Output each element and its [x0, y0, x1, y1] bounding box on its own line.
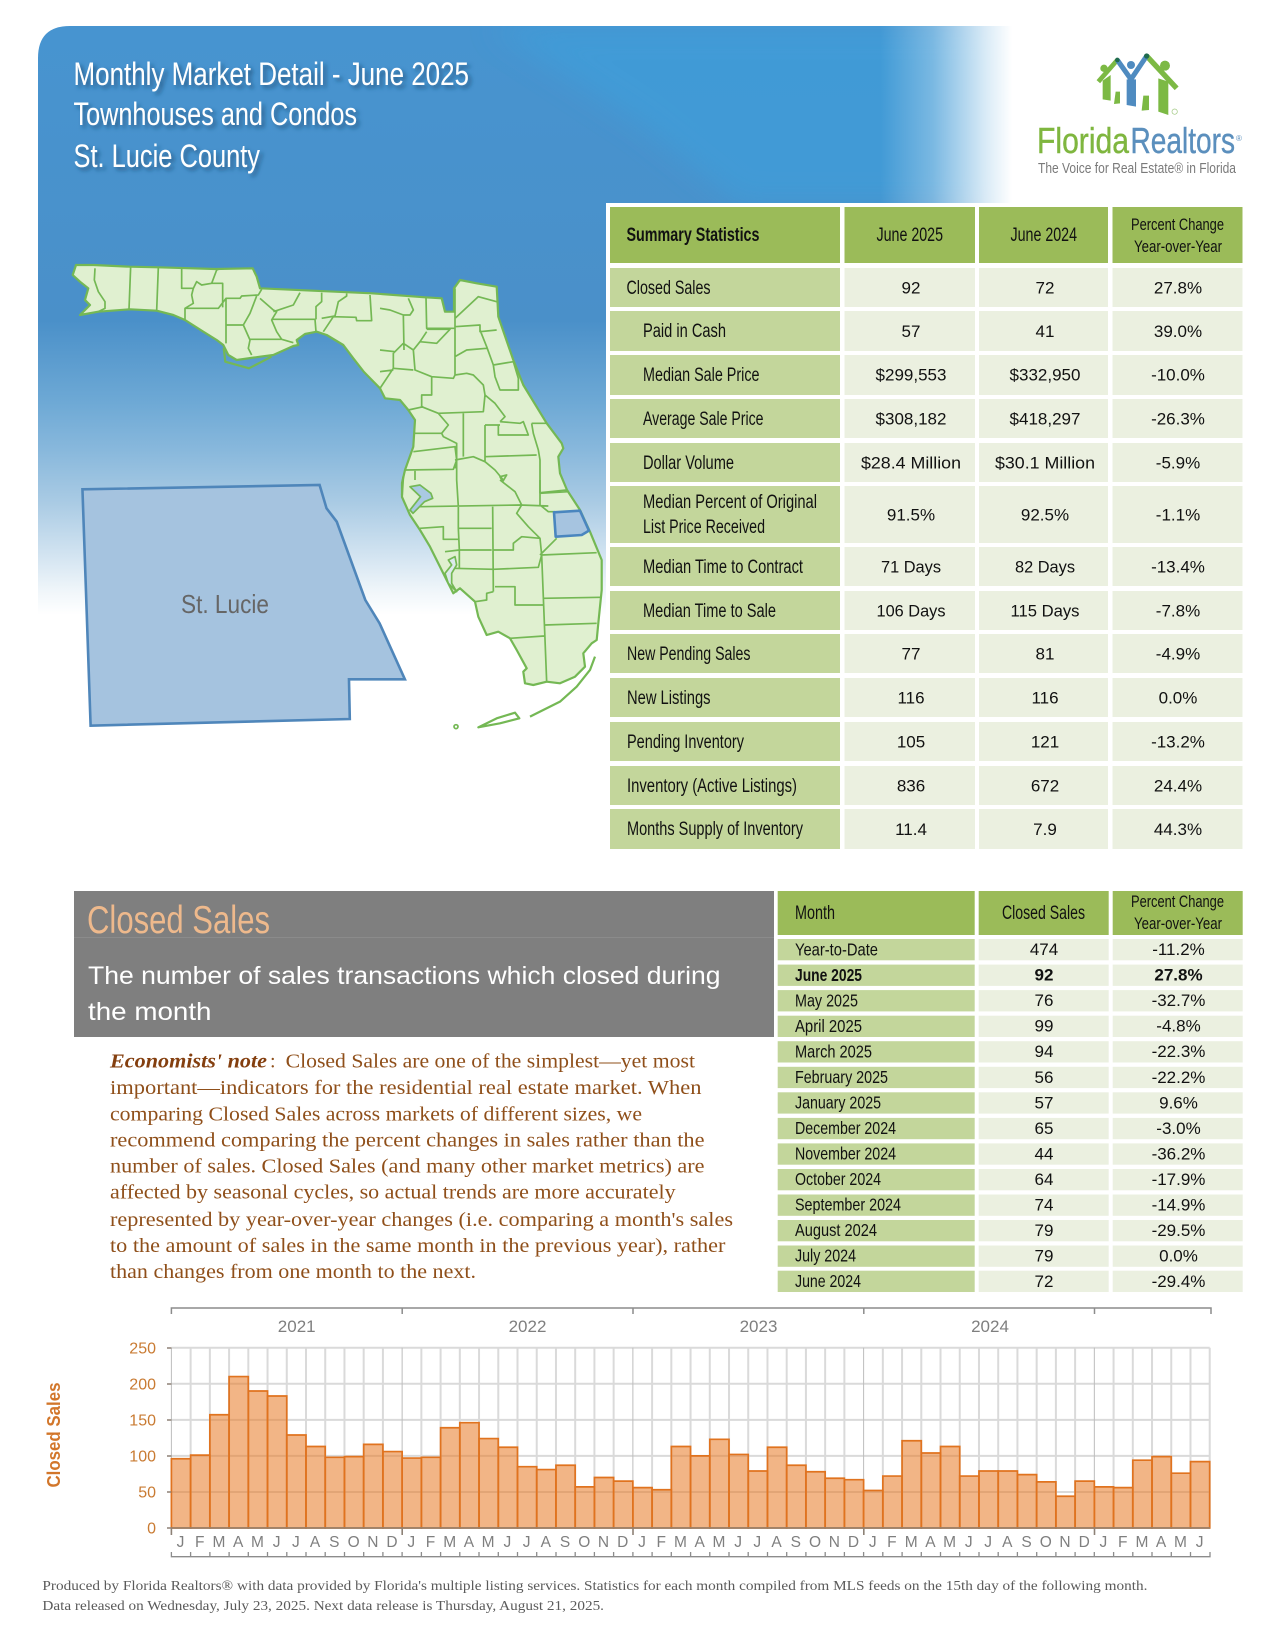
row: Closed Sales: Closed Sales — [626, 278, 710, 299]
row: April 2025: April 2025 — [795, 1016, 862, 1036]
logo: Florida Realtors: ® — [1236, 134, 1242, 143]
row: New Listings: 116 — [1031, 688, 1059, 708]
row: Median Time to Contract: 71 Days — [881, 558, 941, 576]
row: Months Supply of Inventory: 11.4 — [895, 820, 927, 839]
row: Closed Sales — [610, 268, 1242, 307]
table header: June 2025 — [876, 225, 943, 246]
row: Median Percent of Original List Price Received: Median Percent of Original — [643, 492, 817, 513]
header banner background — [0, 0, 1275, 640]
row: June 2025: June 2025 — [795, 965, 862, 985]
row: Closed Sales: 27.8% — [1154, 278, 1202, 298]
y axis labels: 100 — [129, 1448, 156, 1466]
wordmark: Florida — [1037, 120, 1130, 161]
text block: economists' note: comparing Closed Sales across markets of different sizes, we — [110, 1104, 642, 1126]
row: Median Sale Price: -10.0% — [1151, 366, 1205, 384]
panel: Closed Sales heading: the month — [88, 998, 212, 1026]
row: Inventory (Active Listings): 836 — [897, 776, 925, 796]
highlighted county on state map — [554, 511, 589, 537]
row: April 2025 — [778, 1016, 1243, 1037]
row: Closed Sales: 72 — [1036, 278, 1054, 298]
row: Pending Inventory: Pending Inventory — [627, 732, 744, 753]
row: Median Time to Sale: 106 Days — [876, 602, 946, 620]
map: St. Lucie county enlarged — [82, 485, 405, 726]
month labels: JFMAMJJASONDJFMAMJJASONDJFMAMJJASONDJFMAMJJASONDJFMAMJ — [177, 1534, 1203, 1551]
y axis labels: 250 — [129, 1340, 156, 1358]
row: Median Time to Sale — [610, 591, 1242, 630]
row: October 2024: -17.9% — [1152, 1170, 1205, 1189]
county lines: south peninsula — [420, 480, 600, 729]
table header: Month — [795, 903, 835, 924]
row: Median Time to Sale: -7.8% — [1156, 602, 1200, 620]
title — [74, 56, 469, 174]
row: Pending Inventory — [610, 722, 1242, 761]
row: January 2025: January 2025 — [795, 1092, 881, 1112]
row: Year-to-Date — [778, 939, 1243, 960]
row: November 2024: -36.2% — [1152, 1144, 1205, 1163]
row: New Pending Sales: -4.9% — [1156, 644, 1200, 664]
row: May 2025: -32.7% — [1152, 991, 1205, 1010]
row: New Listings: New Listings — [627, 688, 710, 709]
row: April 2025: -4.8% — [1156, 1017, 1201, 1036]
row: January 2025: 57 — [1035, 1093, 1053, 1112]
row: September 2024: -14.9% — [1152, 1196, 1205, 1214]
row: Inventory (Active Listings): 672 — [1031, 776, 1059, 796]
Tampa Bay — [410, 485, 433, 513]
row: Closed Sales: 92 — [902, 278, 920, 298]
table header — [610, 207, 1242, 263]
text block: economists' note: represented by year-over-year changes (i.e. comparing a month's sales — [110, 1209, 733, 1231]
row: Median Time to Contract: -13.4% — [1151, 558, 1205, 576]
row: Median Sale Price — [610, 355, 1242, 395]
row: Dollar Volume: $30.1 Million — [995, 454, 1095, 472]
row: November 2024: 44 — [1035, 1144, 1053, 1163]
row: November 2024 — [778, 1143, 1243, 1165]
row: Median Percent of Original List Price Received: -1.1% — [1156, 506, 1200, 524]
barrier islands — [224, 348, 403, 495]
row: Months Supply of Inventory: Months Supply of Inventory — [627, 819, 803, 840]
row: Year-to-Date: Year-to-Date — [795, 940, 878, 960]
logo: Florida Realtors: Realtors — [1130, 120, 1235, 161]
row: Paid in Cash: 39.0% — [1154, 322, 1202, 341]
row: December 2024: -3.0% — [1156, 1119, 1201, 1138]
row: Inventory (Active Listings): 24.4% — [1154, 776, 1202, 796]
row: May 2025: May 2025 — [795, 990, 858, 1010]
row: Average Sale Price: -26.3% — [1151, 410, 1205, 428]
row: Dollar Volume: -5.9% — [1156, 454, 1200, 472]
table header: Year-over-Year — [1134, 915, 1222, 933]
row: Dollar Volume: $28.4 Million — [861, 454, 961, 472]
tagline: The Voice for Real Estate® in Florida — [1038, 161, 1237, 177]
Florida Keys — [478, 657, 595, 727]
row: New Listings — [610, 678, 1242, 717]
text block: economists' note — [109, 1051, 733, 1283]
heading: Closed Sales — [87, 899, 270, 942]
row: October 2024 — [778, 1169, 1243, 1190]
row: June 2024: June 2024 — [795, 1271, 861, 1291]
y axis labels: 150 — [129, 1412, 156, 1430]
text block: economists' note: than changes from one month to the next. — [110, 1261, 476, 1283]
row: Dollar Volume — [610, 443, 1242, 482]
row: September 2024: 74 — [1035, 1196, 1053, 1214]
state outline — [73, 265, 602, 685]
row: April 2025: 99 — [1035, 1017, 1053, 1036]
row: Dollar Volume: Dollar Volume — [643, 453, 734, 474]
row: December 2024: 65 — [1035, 1119, 1053, 1138]
year labels: 2021 — [278, 1317, 316, 1336]
row: October 2024: 64 — [1035, 1170, 1053, 1189]
row: February 2025: 56 — [1035, 1068, 1053, 1087]
row: New Listings: 0.0% — [1159, 688, 1197, 708]
row: August 2024 — [778, 1220, 1243, 1241]
row: May 2025 — [778, 990, 1243, 1011]
row: February 2025: February 2025 — [795, 1067, 888, 1087]
row: January 2025: 9.6% — [1159, 1093, 1198, 1112]
row: Median Percent of Original List Price Received — [610, 486, 1242, 543]
panel: closed sales by month table — [778, 891, 1243, 1292]
row: Months Supply of Inventory: 7.9 — [1033, 820, 1057, 839]
row: August 2024: -29.5% — [1152, 1221, 1205, 1240]
row: Paid in Cash: 41 — [1036, 322, 1054, 341]
row: Median Percent of Original List Price Received: List Price Received — [643, 517, 765, 538]
row: June 2025 — [778, 965, 1243, 986]
row: Pending Inventory: 105 — [897, 732, 925, 752]
county lines: panhandle — [94, 267, 372, 355]
row: December 2024: December 2024 — [795, 1118, 896, 1138]
row: Year-to-Date: 474 — [1030, 940, 1058, 959]
row: Paid in Cash — [610, 311, 1242, 351]
row: Paid in Cash: 57 — [902, 322, 920, 341]
row: Average Sale Price: $308,182 — [876, 410, 946, 428]
row: Median Time to Contract: 82 Days — [1015, 558, 1075, 576]
row: August 2024: 79 — [1035, 1221, 1053, 1240]
row: July 2024: 79 — [1035, 1246, 1053, 1266]
table header: Summary Statistics — [626, 225, 760, 246]
row: June 2024 — [778, 1271, 1243, 1292]
row: January 2025 — [778, 1092, 1243, 1114]
y axis labels — [129, 1340, 156, 1538]
year labels: 2022 — [509, 1317, 546, 1336]
bar chart: closed sales 2021-2025 — [44, 1308, 1211, 1557]
row: Median Time to Contract — [610, 547, 1242, 586]
row: June 2024: -29.4% — [1152, 1272, 1205, 1291]
county label: St. Lucie — [181, 589, 269, 619]
row: June 2024: 72 — [1035, 1272, 1053, 1291]
map: Florida counties — [73, 265, 602, 729]
row: March 2025: March 2025 — [795, 1042, 872, 1062]
plot — [171, 1348, 1210, 1528]
row: Median Percent of Original List Price Received: 91.5% — [887, 506, 935, 524]
row: Median Percent of Original List Price Received: 92.5% — [1021, 506, 1069, 524]
text block: economists' note: recommend comparing the percent changes in sales rather than the — [110, 1130, 705, 1152]
x axis lines and ticks — [167, 1348, 1210, 1535]
row: July 2024: July 2024 — [795, 1246, 856, 1266]
row: New Pending Sales: 77 — [902, 644, 920, 664]
row: September 2024 — [778, 1194, 1243, 1216]
row: July 2024: 0.0% — [1159, 1246, 1198, 1266]
footer note: Produced by Florida Realtors® with data provided by Florida's multiple listing services. Statistics for each month compiled from MLS feeds on the 15th day of the following month. — [42, 1579, 1147, 1594]
row: Year-to-Date: -11.2% — [1152, 940, 1205, 959]
row: Average Sale Price — [610, 399, 1242, 438]
row: Median Time to Sale: 115 Days — [1010, 602, 1080, 620]
county lines: north peninsula — [380, 288, 567, 493]
footer note — [42, 1579, 1147, 1614]
table header: Closed Sales — [1002, 903, 1085, 924]
row: February 2025: -22.2% — [1152, 1068, 1205, 1087]
panel: Closed Sales heading — [74, 891, 774, 1037]
row: June 2025: 27.8% — [1154, 966, 1203, 984]
row: November 2024: November 2024 — [795, 1144, 896, 1164]
row: September 2024: September 2024 — [795, 1194, 901, 1214]
table header: Percent Change — [1131, 893, 1224, 911]
title: Monthly Market Detail - June 2025 — [74, 56, 469, 92]
row: August 2024: August 2024 — [795, 1220, 877, 1240]
table header: June 2024 — [1010, 225, 1077, 246]
text block: economists' note: : — [270, 1051, 276, 1073]
row: March 2025: 94 — [1035, 1042, 1053, 1061]
row: New Pending Sales — [610, 634, 1242, 673]
row: Median Time to Sale: Median Time to Sale — [643, 601, 776, 622]
footer note: Data released on Wednesday, July 23, 2025. Next data release is Thursday, August 21, 2025. — [42, 1599, 604, 1614]
text block: economists' note: affected by seasonal cycles, so actual trends are more accurately — [110, 1182, 676, 1204]
row: October 2024: October 2024 — [795, 1169, 881, 1189]
text block: economists' note: to the amount of sales in the same month in the previous year), rather — [110, 1235, 726, 1257]
table header — [778, 891, 1243, 935]
row: March 2025: -22.3% — [1152, 1042, 1205, 1061]
row: Average Sale Price: Average Sale Price — [643, 409, 764, 430]
description: The number of sales transactions which closed during — [88, 962, 720, 990]
row: July 2024 — [778, 1246, 1243, 1267]
Charlotte Harbor — [445, 557, 457, 592]
year axis — [171, 1308, 1211, 1314]
row: Median Sale Price: Median Sale Price — [643, 365, 760, 386]
table header: Percent Change — [1131, 216, 1224, 234]
row: Average Sale Price: $418,297 — [1010, 410, 1080, 428]
text block: economists' note: Closed Sales are one of the simplest—yet most — [286, 1051, 695, 1073]
row: Months Supply of Inventory — [610, 809, 1242, 849]
row: New Listings: 116 — [897, 688, 925, 708]
title: St. Lucie County — [74, 138, 260, 174]
year labels: 2024 — [971, 1317, 1009, 1336]
row: Median Sale Price: $299,553 — [876, 366, 946, 384]
row: Months Supply of Inventory: 44.3% — [1154, 820, 1202, 839]
year labels — [278, 1317, 1009, 1336]
row: New Pending Sales: 81 — [1036, 644, 1054, 664]
icon: house and people — [1098, 53, 1177, 115]
y axis labels: 50 — [138, 1484, 156, 1502]
table header: Year-over-Year — [1134, 238, 1222, 256]
y axis labels: 200 — [129, 1376, 156, 1394]
row: Inventory (Active Listings): Inventory (Active Listings) — [627, 776, 797, 797]
text block: economists' note: important—indicators for the residential real estate market. When — [110, 1077, 702, 1099]
row: May 2025: 76 — [1035, 991, 1053, 1010]
y axis title: Closed Sales — [44, 1382, 64, 1488]
row: February 2025 — [778, 1067, 1243, 1088]
row: Pending Inventory: 121 — [1031, 732, 1059, 752]
row: June 2025: 92 — [1035, 966, 1053, 984]
text block: economists' note: number of sales. Closed Sales (and many other market metrics) are — [110, 1156, 705, 1178]
logo: Florida Realtors — [1037, 53, 1242, 177]
panel: summary statistics table — [610, 207, 1242, 849]
row: Paid in Cash: Paid in Cash — [643, 321, 726, 342]
row: March 2025 — [778, 1041, 1243, 1062]
row: Inventory (Active Listings) — [610, 766, 1242, 805]
text block: economists' note: Economists' note — [109, 1051, 267, 1073]
year labels: 2023 — [740, 1317, 777, 1336]
row: December 2024 — [778, 1118, 1243, 1139]
row: Pending Inventory: -13.2% — [1151, 732, 1205, 752]
title: Townhouses and Condos — [74, 96, 357, 132]
row: Median Sale Price: $332,950 — [1010, 366, 1080, 384]
row: New Pending Sales: New Pending Sales — [627, 644, 750, 665]
y axis labels: 0 — [147, 1520, 156, 1538]
row: Median Time to Contract: Median Time to Contract — [643, 557, 804, 578]
